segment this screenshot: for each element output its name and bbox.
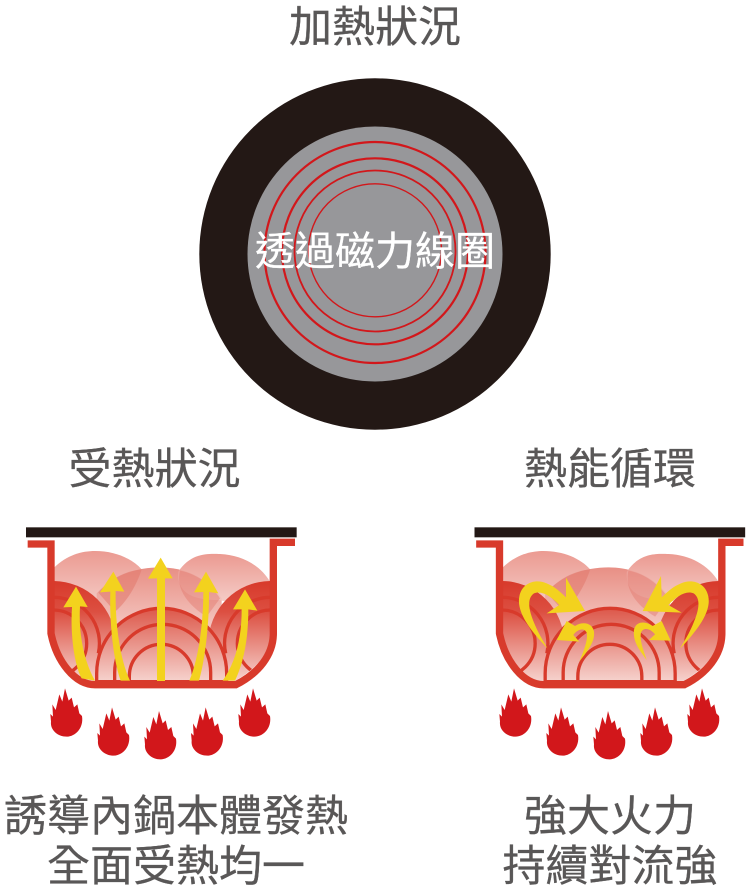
left pot diagram — [0, 527, 333, 706]
gray inner plate — [248, 126, 502, 382]
circulating yellow arrows — [519, 576, 709, 662]
right caption: 強大火力 — [524, 793, 696, 841]
left caption: 全面受熱均一 — [47, 843, 305, 890]
coil label: 透過磁力線圈 — [255, 230, 495, 274]
left caption: 誘導內鍋本體發熱 — [4, 793, 348, 841]
right pot flames — [499, 688, 719, 759]
right caption: 持續對流強 — [502, 843, 718, 890]
induction coil disc — [199, 78, 551, 430]
upward yellow arrows — [63, 558, 257, 681]
right pot diagram — [440, 527, 750, 706]
left caption — [4, 793, 348, 890]
left pot flames — [50, 688, 270, 759]
heading: heat circulation: 熱能循環 — [524, 446, 696, 494]
red magnetic coils — [264, 142, 486, 363]
right caption — [502, 793, 718, 890]
heading: heat reception: 受熱狀況 — [68, 446, 240, 494]
black outer ring — [199, 78, 551, 430]
title: heating condition: 加熱狀況 — [289, 4, 461, 52]
